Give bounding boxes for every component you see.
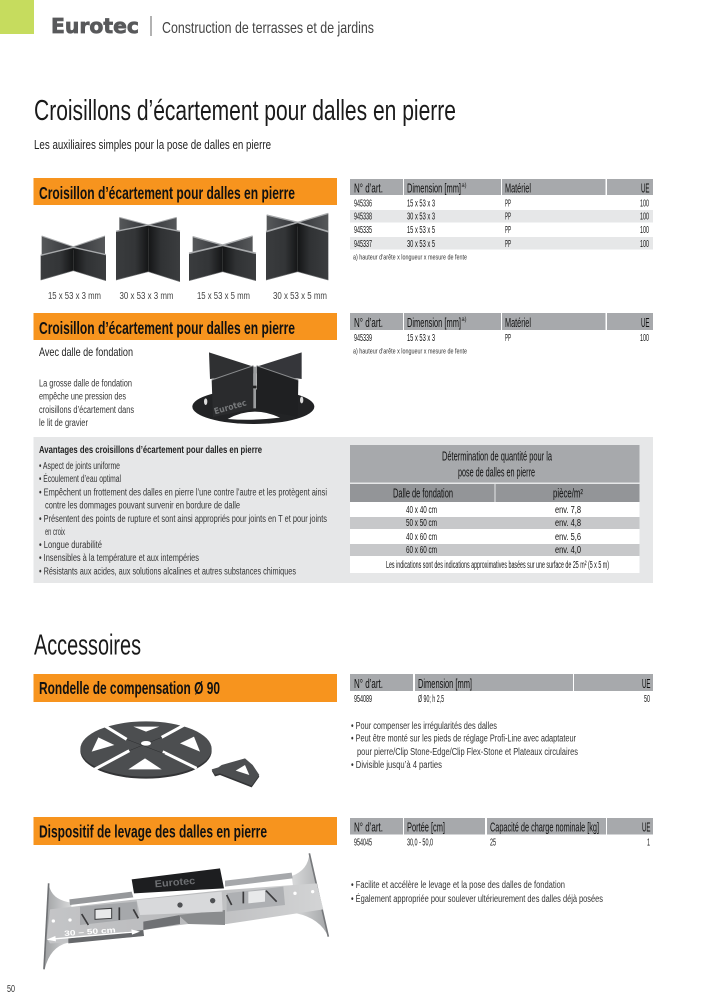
table: washer article: Ø 90; h 2,5 xyxy=(418,694,444,705)
heading bar: spacers: Croisillon d’écartement pour dalles en pierre xyxy=(39,183,295,203)
benefits list: • Présentent des points de rupture et sont ainsi appropriés pour joints en T et pour joints xyxy=(39,514,327,525)
table: spacer articles: 100 xyxy=(640,225,649,236)
spacer size captions: 15 x 53 x 5 mm xyxy=(197,291,250,302)
table: base plate spacer article: 100 xyxy=(640,333,649,344)
table: base plate spacer article: a) xyxy=(462,317,466,323)
washer features: • Divisible jusqu’à 4 parties xyxy=(351,760,442,771)
table: spacer articles xyxy=(350,179,653,262)
washer features: • Pour compenser les irrégularités des dalles xyxy=(351,721,497,732)
table: spacer articles: Dimension [mm] xyxy=(407,182,461,196)
icon: spacer 15 x 53 x 3 xyxy=(41,236,106,281)
heading bar: spacer with base plate: Croisillon d’écartement pour dalles en pierre xyxy=(39,318,295,338)
benefits list: • Aspect de joints uniforme xyxy=(39,461,120,472)
table: washer article: 954089 xyxy=(354,694,372,705)
table: quantity determination: 50 x 50 cm xyxy=(406,518,437,529)
table: quantity determination: env. 4,8 xyxy=(555,518,581,529)
table: spacer articles: 945337 xyxy=(354,239,372,250)
table: spacer articles: 15 x 53 x 3 xyxy=(407,198,435,210)
product photo: paving lifter xyxy=(44,853,328,969)
benefits list: • Longue durabilité xyxy=(39,540,102,551)
table: base plate spacer article: UE xyxy=(641,316,650,330)
table: quantity determination: 40 x 60 cm xyxy=(406,532,437,543)
table: lifter article xyxy=(350,818,653,848)
table: spacer articles: 30 x 53 x 5 xyxy=(407,239,435,250)
benefits list: • Écoulement d’eau optimal xyxy=(39,472,121,485)
benefits list xyxy=(39,444,327,578)
description text: La grosse dalle de fondation xyxy=(39,378,132,390)
table: lifter article: Portée [cm] xyxy=(407,820,445,834)
table: quantity determination: 60 x 60 cm xyxy=(406,545,437,556)
benefits list: • Empêchent un frottement des dalles en pierre l’une contre l’autre et les protègent ainsi xyxy=(39,488,327,498)
table: quantity determination: Détermination de quantité pour la xyxy=(442,450,552,464)
lifter features: • Facilite et accélère le levage et la pose des dalles de fondation xyxy=(351,880,565,891)
table: base plate spacer article: 15 x 53 x 3 xyxy=(407,333,435,344)
icon: spacer 30 x 53 x 3 xyxy=(116,217,180,282)
table: spacer articles: 945338 xyxy=(354,212,372,222)
page number: 50 xyxy=(7,984,15,995)
table: spacer articles: 945336 xyxy=(354,198,372,210)
table: spacer articles: 100 xyxy=(640,212,649,222)
description text: croisillons d’écartement dans xyxy=(39,405,134,416)
subtitle: Les auxiliaires simples pour la pose de dalles en pierre xyxy=(34,138,271,152)
left end plate xyxy=(45,883,72,969)
section title: accessories: Accessoires xyxy=(34,630,141,662)
mechanism right xyxy=(227,887,285,912)
benefits list: • Insensibles à la température et aux intempéries xyxy=(39,553,199,564)
table: lifter article: 25 xyxy=(490,838,496,848)
spacer size captions: 30 x 53 x 3 mm xyxy=(120,291,174,302)
table: spacer articles: PP xyxy=(505,198,511,210)
table: spacer articles: 15 x 53 x 5 xyxy=(407,225,435,236)
product photo: spacer on base plate xyxy=(192,352,314,424)
table: base plate spacer article: 945339 xyxy=(354,333,372,344)
washer features: pour pierre/Clip Stone-Edge/Clip Flex-Stone et Plateaux circulaires xyxy=(357,747,578,758)
table: washer article: UE xyxy=(642,677,650,691)
heading bar: compensation washer: Rondelle de compensation Ø 90 xyxy=(39,678,220,698)
panel: benefits and quantity xyxy=(34,437,653,583)
table: spacer articles: Matériel xyxy=(505,182,531,196)
table: quantity determination: env. 5,6 xyxy=(555,532,581,543)
brand divider xyxy=(150,16,152,36)
description text xyxy=(39,378,134,429)
product photos: four spacers xyxy=(41,213,328,282)
table: base plate spacer article: Dimension [mm] xyxy=(407,316,461,330)
lifter features xyxy=(351,880,603,905)
spacer size captions xyxy=(48,291,327,302)
table: quantity determination xyxy=(350,445,640,573)
heading bar: compensation washer xyxy=(34,674,337,702)
benefits list: en croix xyxy=(45,527,65,538)
green corner tab xyxy=(0,0,34,34)
benefits list: • Résistants aux acides, aux solutions alcalines et autres substances chimiques xyxy=(39,566,296,578)
icon: spacer 30 x 53 x 5 xyxy=(266,213,328,280)
table: base plate spacer article: N° d’art. xyxy=(354,316,383,330)
table: quantity determination: 40 x 40 cm xyxy=(406,505,437,516)
mechanism left xyxy=(80,902,138,925)
table: washer article: 50 xyxy=(644,694,650,705)
table: quantity determination: pose de dalles en pierre xyxy=(458,466,535,480)
table: spacer articles: 30 x 53 x 3 xyxy=(407,212,435,222)
table: lifter article: 30,0 - 50,0 xyxy=(407,838,433,848)
lifter features: • Également appropriée pour soulever ultérieurement des dalles déjà posées xyxy=(351,892,603,905)
icon: separated washer segment xyxy=(212,758,259,787)
span arrow xyxy=(47,925,140,941)
table: base plate spacer article xyxy=(350,313,653,356)
benefits list: contre les dommages pouvant survenir en bordure de dalle xyxy=(45,500,240,512)
table: quantity determination: env. 7,8 xyxy=(555,505,581,516)
icon: spacer 15 x 53 x 5 xyxy=(189,236,256,281)
table: base plate spacer article: Matériel xyxy=(505,316,531,330)
heading bar: spacers xyxy=(34,178,337,205)
table: spacer articles: PP xyxy=(505,239,511,250)
table: spacer articles: PP xyxy=(505,225,511,236)
black handle xyxy=(132,868,224,893)
subheading: Avec dalle de fondation xyxy=(39,345,133,359)
table: lifter article: N° d’art. xyxy=(354,820,383,834)
spacer size captions: 30 x 53 x 5 mm xyxy=(273,291,327,302)
heading bar: paving lifter: Dispositif de levage des dalles en pierre xyxy=(39,822,267,842)
table: spacer articles: N° d’art. xyxy=(354,182,383,196)
base plate description xyxy=(39,345,134,429)
spacer size captions: 15 x 53 x 3 mm xyxy=(48,291,101,302)
table: base plate spacer article: a) hauteur d’arête x longueur x mesure de fente xyxy=(353,346,467,356)
table: washer article: N° d’art. xyxy=(354,677,383,691)
washer features: • Peut être monté sur les pieds de réglage Profi-Line avec adaptateur xyxy=(351,734,576,744)
right end plate xyxy=(292,853,328,937)
black handle: Eurotec xyxy=(154,876,196,890)
washer features xyxy=(351,721,578,771)
heading bar: paving lifter xyxy=(34,817,337,845)
benefits list: Avantages des croisillons d’écartement pour dalles en pierre xyxy=(39,444,262,456)
Eurotec logo: Eurotec xyxy=(51,14,139,38)
table: washer article xyxy=(350,674,653,705)
table: spacer articles: a) xyxy=(462,183,466,189)
product photo: spacer on base plate: Eurotec xyxy=(213,398,248,417)
main rail xyxy=(47,883,323,943)
table: lifter article: 954045 xyxy=(354,838,372,848)
table: spacer articles: UE xyxy=(641,182,650,196)
table: base plate spacer article: PP xyxy=(505,333,511,344)
table: spacer articles: a) hauteur d’arête x longueur x mesure de fente xyxy=(353,252,467,262)
page title: Croisillons d’écartement pour dalles en pierre xyxy=(34,95,456,127)
table: spacer articles: 100 xyxy=(640,198,649,210)
brand header xyxy=(51,14,374,38)
section name: Construction de terrasses et de jardins xyxy=(162,20,374,37)
table: spacer articles: PP xyxy=(505,212,511,222)
product photo: compensation washer xyxy=(80,721,259,787)
table: lifter article: Capacité de charge nominale [kg] xyxy=(490,820,599,834)
table: lifter article: 1 xyxy=(647,838,650,848)
heading bar: spacer with base plate xyxy=(34,313,337,340)
span arrow: 30 – 50 cm xyxy=(64,925,116,938)
table: quantity determination: Dalle de fondation xyxy=(393,486,453,500)
table: spacer articles: 945335 xyxy=(354,225,372,236)
table: quantity determination: pièce/m² xyxy=(553,486,583,500)
description text: empêche une pression des xyxy=(39,392,126,402)
table: washer article: Dimension [mm] xyxy=(418,677,472,691)
table: quantity determination: env. 4,0 xyxy=(555,545,581,556)
description text: le lit de gravier xyxy=(39,418,89,429)
table: lifter article: UE xyxy=(642,820,650,834)
table: spacer articles: 100 xyxy=(640,239,649,250)
